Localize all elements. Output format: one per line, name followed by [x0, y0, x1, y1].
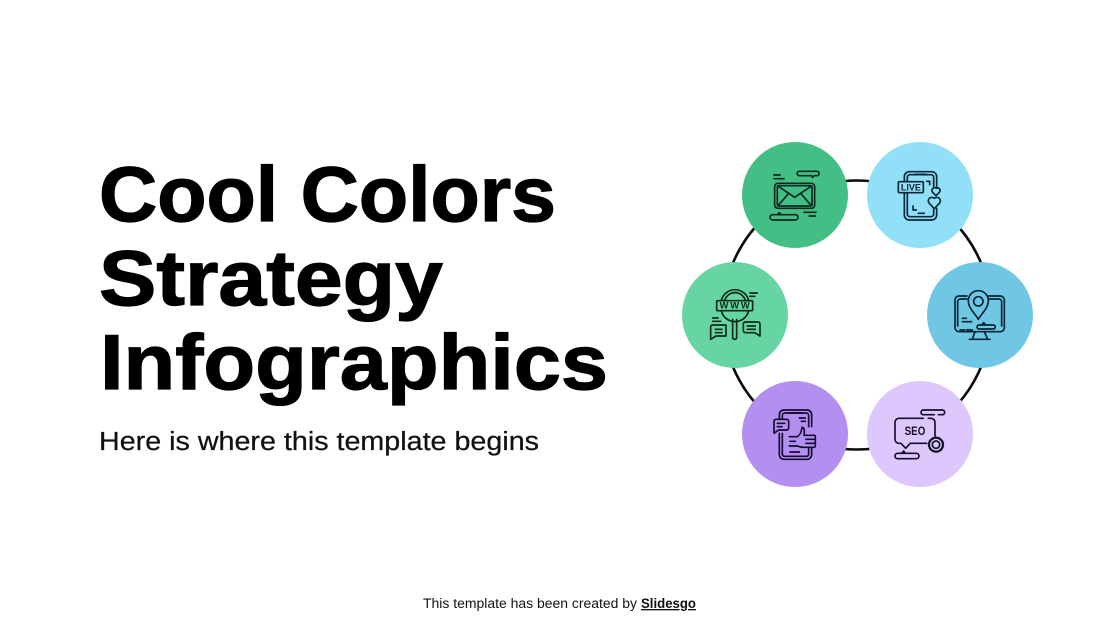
icon: envelope: [770, 171, 819, 220]
title: [99, 150, 608, 406]
icon: SEO bubble with gear: SEO: [905, 424, 926, 438]
icon: live phone: LIVE: [901, 182, 921, 192]
title: Strategy: [99, 234, 443, 322]
icon: monitor with pin: [955, 291, 1004, 339]
footer credit: This template has been created by: [423, 596, 637, 611]
icon: phone with thumbs up: [774, 410, 815, 459]
node: SEO: [867, 381, 973, 487]
ring connecting the circles: [722, 180, 992, 450]
title: Cool Colors: [99, 150, 556, 238]
node: website search: [682, 262, 788, 368]
node: location monitor: [927, 262, 1033, 368]
subtitle: Here is where this template begins: [99, 428, 539, 456]
footer credit: Slidesgo: [641, 596, 696, 611]
node: email: [742, 142, 848, 248]
node: live phone: [867, 142, 973, 248]
title: Infographics: [100, 318, 608, 406]
node: social like phone: [742, 381, 848, 487]
icon: magnifier with www: WWW: [720, 301, 750, 311]
